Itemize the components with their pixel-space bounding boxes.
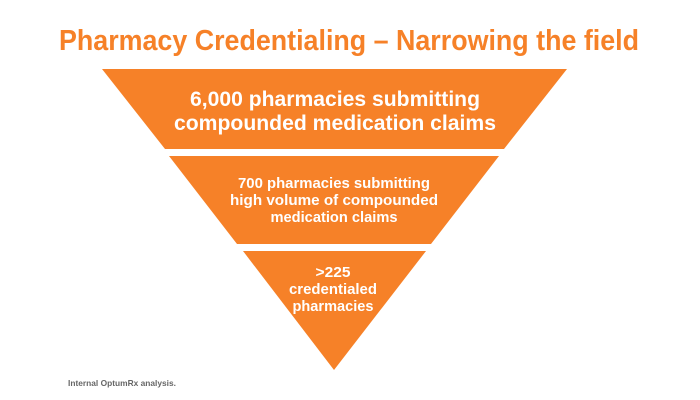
title: Pharmacy Credentialing – Narrowing the field (59, 25, 639, 57)
funnel tier 1: 6,000 pharmacies (102, 69, 567, 149)
funnel tier 1: 6,000 pharmacies: 6,000 pharmacies submitting (190, 87, 480, 111)
funnel tier 3: credentialed pharmacies (243, 251, 426, 370)
funnel tier 2: 700 pharmacies: medication claims (270, 209, 398, 226)
funnel tier 2: 700 pharmacies: high volume of compounded (230, 192, 438, 209)
funnel tier 3: credentialed pharmacies: credentialed (289, 281, 377, 298)
source note: Internal OptumRx analysis. (68, 378, 176, 388)
funnel tier 3: credentialed pharmacies: pharmacies (292, 298, 374, 315)
funnel tier 2: 700 pharmacies: 700 pharmacies submitting (238, 175, 430, 192)
funnel tier 3: credentialed pharmacies: >225 (316, 264, 350, 281)
funnel tier 2: 700 pharmacies (169, 156, 499, 244)
funnel tier 1: 6,000 pharmacies: compounded medication claims (174, 111, 496, 135)
